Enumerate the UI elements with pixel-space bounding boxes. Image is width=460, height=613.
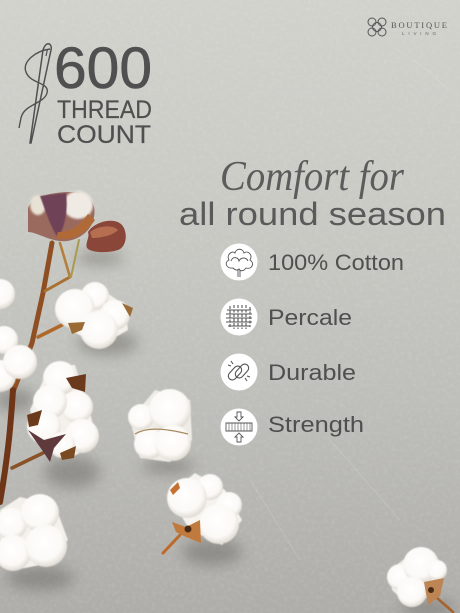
feature list <box>220 244 404 446</box>
photo: cotton branch and bolls <box>0 191 456 613</box>
boll: bottom left <box>0 494 68 571</box>
heading <box>179 154 446 232</box>
boll husk: bottom centre <box>170 482 201 543</box>
label COUNT: COUNT <box>57 121 151 149</box>
icon: compression arrows <box>220 408 258 446</box>
boll crease <box>135 429 188 434</box>
boll: bottom right <box>387 547 447 607</box>
boll: bottom centre <box>167 473 242 545</box>
feature: 100% cotton <box>220 244 404 280</box>
boll: centre left <box>27 361 99 458</box>
feature: strength <box>220 408 364 446</box>
flower bud <box>28 191 95 241</box>
logo: Boutique Living <box>368 18 447 36</box>
boll husk <box>68 303 133 334</box>
boll: centre <box>128 389 192 462</box>
number 600: 600 <box>54 36 152 101</box>
boll: upper right <box>55 282 130 349</box>
feature: durable <box>220 354 356 390</box>
brand sub-name: LIVING <box>402 31 436 36</box>
label: 100% Cotton <box>268 250 404 275</box>
icon: cotton plant <box>220 244 258 280</box>
shadows <box>0 251 456 613</box>
boll husks <box>27 374 86 462</box>
thread count badge <box>19 36 152 149</box>
seed pod <box>87 221 126 252</box>
branch <box>0 240 453 612</box>
icon: woven fabric <box>220 298 258 336</box>
label: Percale <box>268 305 352 330</box>
icon: logo mark <box>368 18 386 36</box>
label: Durable <box>268 360 356 385</box>
icon: chain link <box>220 354 258 390</box>
feature: percale <box>220 298 352 336</box>
brand name: BOUTIQUE <box>391 20 447 30</box>
script heading: Comfort for <box>220 154 405 200</box>
boll husk: bottom right <box>424 578 444 605</box>
icon: needle and thread <box>19 44 51 143</box>
boll: left edge <box>0 279 37 392</box>
label: Strength <box>268 412 364 437</box>
subheading: all round season <box>179 196 446 232</box>
label THREAD: THREAD <box>57 96 152 124</box>
